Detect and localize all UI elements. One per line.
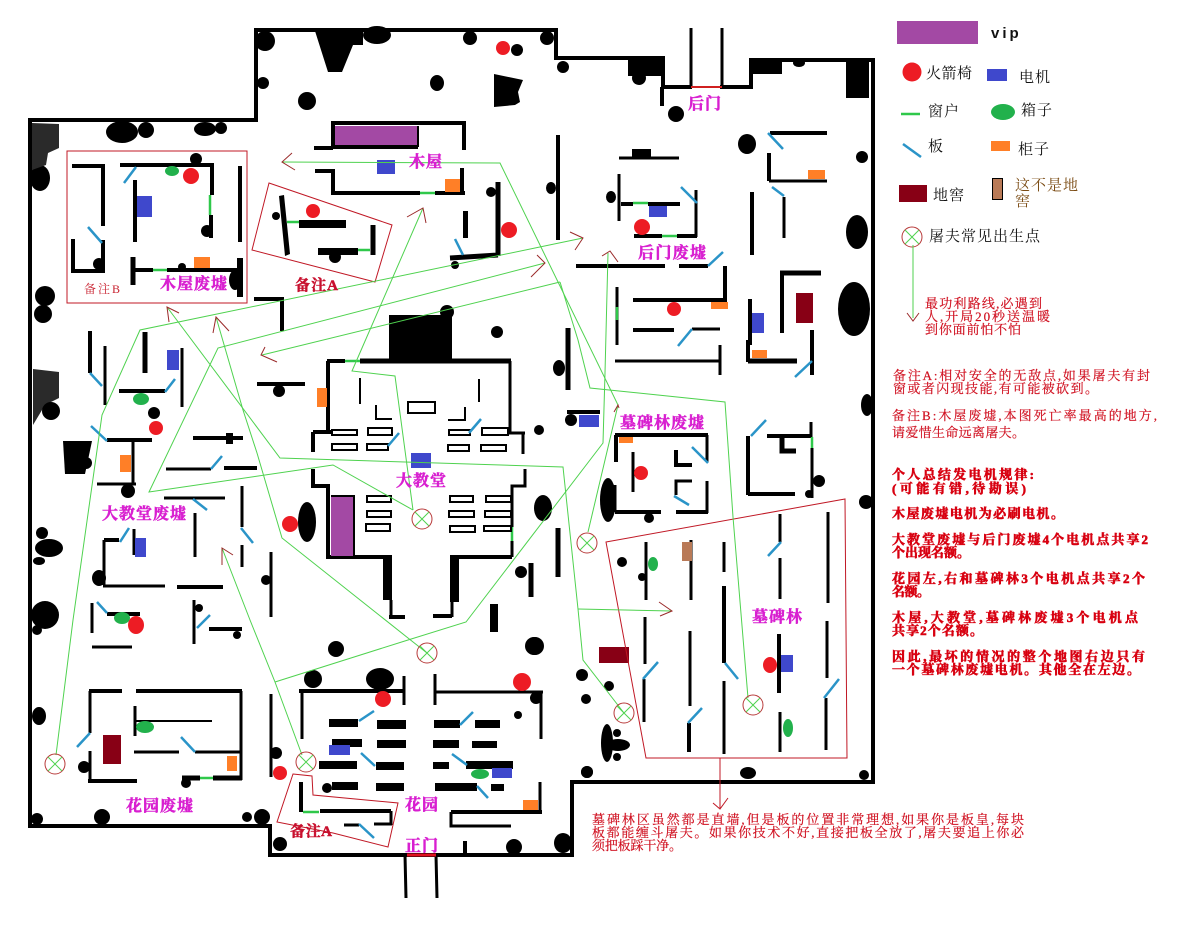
legend: 火箭椅 xyxy=(926,65,972,82)
panel: wood house side wall xyxy=(450,41,517,269)
generator rule summary xyxy=(892,467,1148,678)
cemetery note: 墓碑林区虽然都是直墙,但是板的位置非常理想,如果你是板皇,每块 xyxy=(592,812,1024,827)
area labels xyxy=(84,95,802,855)
map outer wall xyxy=(30,28,873,898)
panel: garden xyxy=(277,668,593,855)
area labels: 木屋 xyxy=(409,153,442,171)
panel: cemetery ruins xyxy=(600,435,708,523)
killer spawn points xyxy=(45,509,763,774)
notes A and B: 窗或者闪现技能,有可能被砍到。 xyxy=(893,381,1098,396)
area labels: 花园废墟 xyxy=(126,796,193,815)
generator rule summary: 因此,最坏的情况的整个地图右边只有 xyxy=(892,649,1145,664)
area labels: 花园 xyxy=(405,795,438,814)
legend: 窗户 xyxy=(928,102,959,120)
panel: church ruins xyxy=(90,331,298,587)
generator rule summary: 大教堂废墟与后门废墟4个电机点共享2 xyxy=(892,532,1148,547)
generator rule summary: 名额。 xyxy=(892,584,930,599)
generator rule summary: 花园左,右和墓碑林3个电机点共享2个 xyxy=(892,571,1145,586)
legend: 窖 xyxy=(1015,192,1030,210)
area labels: 后门废墟 xyxy=(638,243,706,262)
panel: garden ruins xyxy=(77,691,287,788)
legend: 地窖 xyxy=(933,186,964,204)
area labels: 大教堂废墟 xyxy=(102,504,186,523)
panel: east rooms xyxy=(748,133,827,377)
generator rule summary: 个人总结发电机规律: xyxy=(892,467,1034,482)
panel: generator by church east xyxy=(567,412,600,427)
notes A and B: 备注B:木屋废墟,本图死亡率最高的地方, xyxy=(892,408,1157,423)
legend: 柜子 xyxy=(1018,140,1049,158)
generator rule summary: 木屋,大教堂,墓碑林废墟3个电机点 xyxy=(892,610,1139,625)
panel: church xyxy=(313,315,525,617)
legend: 屠夫常见出生点 xyxy=(929,227,1041,245)
legend: 人,开局20秒送温暖 xyxy=(925,309,1050,324)
route arrowheads xyxy=(167,153,672,616)
panel: wood house ruins xyxy=(67,151,247,303)
generator rule summary: 一个墓碑林废墟电机。其他全在左边。 xyxy=(892,662,1140,678)
generator rule summary: (可能有错,待勘误) xyxy=(892,481,1026,496)
legend: 到你面前怕不怕 xyxy=(925,322,1021,337)
legend: 这不是地 xyxy=(1015,176,1078,194)
legend: 板 xyxy=(928,137,943,155)
generator rule summary: 木屋废墟电机为必刷电机。 xyxy=(892,506,1064,521)
survivor routes xyxy=(56,162,748,755)
generator rule summary: 共享2个名额。 xyxy=(892,623,983,638)
area labels: 大教堂 xyxy=(396,471,446,490)
legend: 箱子 xyxy=(1021,102,1052,119)
cemetery note: 板都能缠斗屠夫。如果你技术不好,直接把板全放了,屠夫要追上你必 xyxy=(592,825,1025,840)
panel: wood house xyxy=(314,123,465,193)
panel: safe spot A upper xyxy=(252,183,392,282)
notes A and B xyxy=(892,368,1157,440)
generator rule summary: 个出现名额。 xyxy=(892,545,970,560)
legend xyxy=(897,21,1078,337)
area labels: 备注A xyxy=(295,276,338,294)
cemetery callout arrow xyxy=(713,758,728,809)
cemetery note xyxy=(592,812,1025,853)
panel: back door ruins xyxy=(576,149,728,375)
legend: 最功利路线,必遇到 xyxy=(925,296,1042,311)
area labels: 备注B xyxy=(84,282,120,296)
panel: cemetery xyxy=(599,499,847,758)
legend: 电机 xyxy=(1019,68,1050,86)
area labels: 备注A xyxy=(290,822,332,840)
area labels: 墓碑林 xyxy=(752,607,802,626)
notes A and B: 请爱惜生命远离屠夫。 xyxy=(892,425,1025,440)
legend: vip xyxy=(991,25,1022,42)
area labels: 后门 xyxy=(688,95,721,113)
area labels: 正门 xyxy=(405,837,438,855)
area labels: 木屋废墟 xyxy=(160,274,227,293)
notes A and B: 备注A:相对安全的无敌点,如果屠夫有封 xyxy=(893,368,1150,383)
panel: east room lower xyxy=(748,420,825,498)
scattered obstacles and rocks xyxy=(30,26,873,855)
cemetery note: 须把板踩干净。 xyxy=(592,838,682,853)
area labels: 墓碑林废墟 xyxy=(620,413,704,432)
panel: southwest rooms xyxy=(92,600,242,647)
